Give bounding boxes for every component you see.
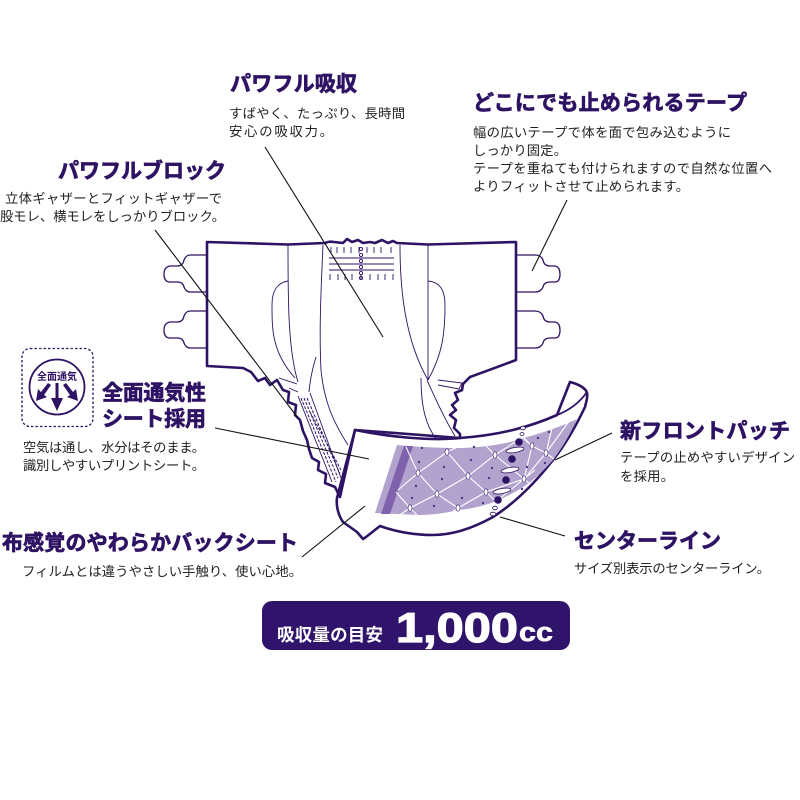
absorption capacity banner: 吸収量の目安	[277, 622, 383, 647]
callout: powerful block: パワフルブロック	[58, 155, 226, 185]
callout: tape: どこにでも止められるテープ	[473, 87, 747, 117]
callout: center line	[574, 525, 770, 577]
callout: new front patch	[620, 415, 795, 485]
callout: tape: よりフィットさせて止められます。	[473, 176, 689, 195]
callout: powerful block	[0, 155, 226, 225]
center size line marks	[490, 426, 525, 516]
callout: soft back sheet: フィルムとは違うやさしい手触り、使い心地。	[22, 561, 302, 580]
callout: powerful absorption	[229, 68, 405, 140]
callout: new front patch: テープの止めやすいデザイン	[620, 447, 795, 466]
leader line: center line	[500, 517, 565, 536]
callout: new front patch: 新フロントパッチ	[620, 415, 790, 445]
leader line: powerful absorption	[265, 147, 383, 337]
callout: breathable sheet: 空気は通し、水分はそのまま。	[23, 437, 205, 456]
leader line: breathable sheet	[215, 428, 369, 459]
callout: tape: しっかり固定。	[473, 140, 567, 159]
diaper body outline	[207, 239, 516, 497]
callout: tape: テープを重ねても付けられますので自然な位置へ	[473, 158, 772, 177]
leader line: front patch	[555, 433, 612, 460]
callout: breathable sheet: 全面通気性	[102, 377, 206, 407]
inner gathers and fold lines	[272, 245, 462, 482]
left fastening tapes	[164, 255, 207, 348]
callout: tape: 幅の広いテープで体を面で包み込むように	[473, 122, 731, 141]
front patch sheet	[337, 382, 587, 539]
callout: breathable sheet	[23, 377, 206, 474]
icon: full-surface breathability badge	[22, 348, 93, 426]
purple front panel	[375, 419, 577, 520]
icon: full-surface breathability badge: 全面通気	[37, 368, 77, 383]
callout: powerful absorption: すばやく、たっぷり、長時間	[229, 103, 405, 122]
absorption capacity banner: 1,000	[396, 604, 518, 651]
leader line: powerful block	[155, 230, 298, 418]
callout: new front patch: を採用。	[620, 466, 674, 485]
diaper illustration	[164, 239, 587, 539]
navy print dots	[411, 431, 550, 507]
callout: powerful block: 立体ギャザーとフィットギャザーで	[5, 188, 222, 207]
callout: powerful absorption: 安心の吸収力。	[229, 121, 333, 140]
absorption capacity banner: cc	[519, 617, 553, 647]
callout: tape	[473, 87, 772, 195]
callout: soft back sheet: 布感覚のやわらかバックシート	[2, 527, 298, 557]
callout: breathable sheet: 識別しやすいプリントシート。	[23, 455, 205, 474]
right fastening tapes	[516, 255, 560, 348]
callout: powerful absorption: パワフル吸収	[230, 68, 357, 98]
absorption capacity banner	[262, 601, 570, 651]
callout: powerful block: 股モレ、横モレをしっかりブロック。	[0, 206, 225, 225]
waist gather ticks	[330, 247, 393, 280]
leader line: back sheet	[302, 506, 365, 557]
callout: soft back sheet	[2, 527, 302, 580]
printed side hatching	[301, 398, 341, 482]
leader line: tape	[532, 200, 567, 271]
white diamond net	[392, 420, 570, 520]
callout: center line: サイズ別表示のセンターライン。	[574, 558, 770, 577]
center size marks	[359, 247, 363, 280]
net junction ovals	[408, 443, 548, 511]
callout: center line: センターライン	[574, 525, 721, 555]
callout: breathable sheet: シート採用	[102, 403, 206, 433]
